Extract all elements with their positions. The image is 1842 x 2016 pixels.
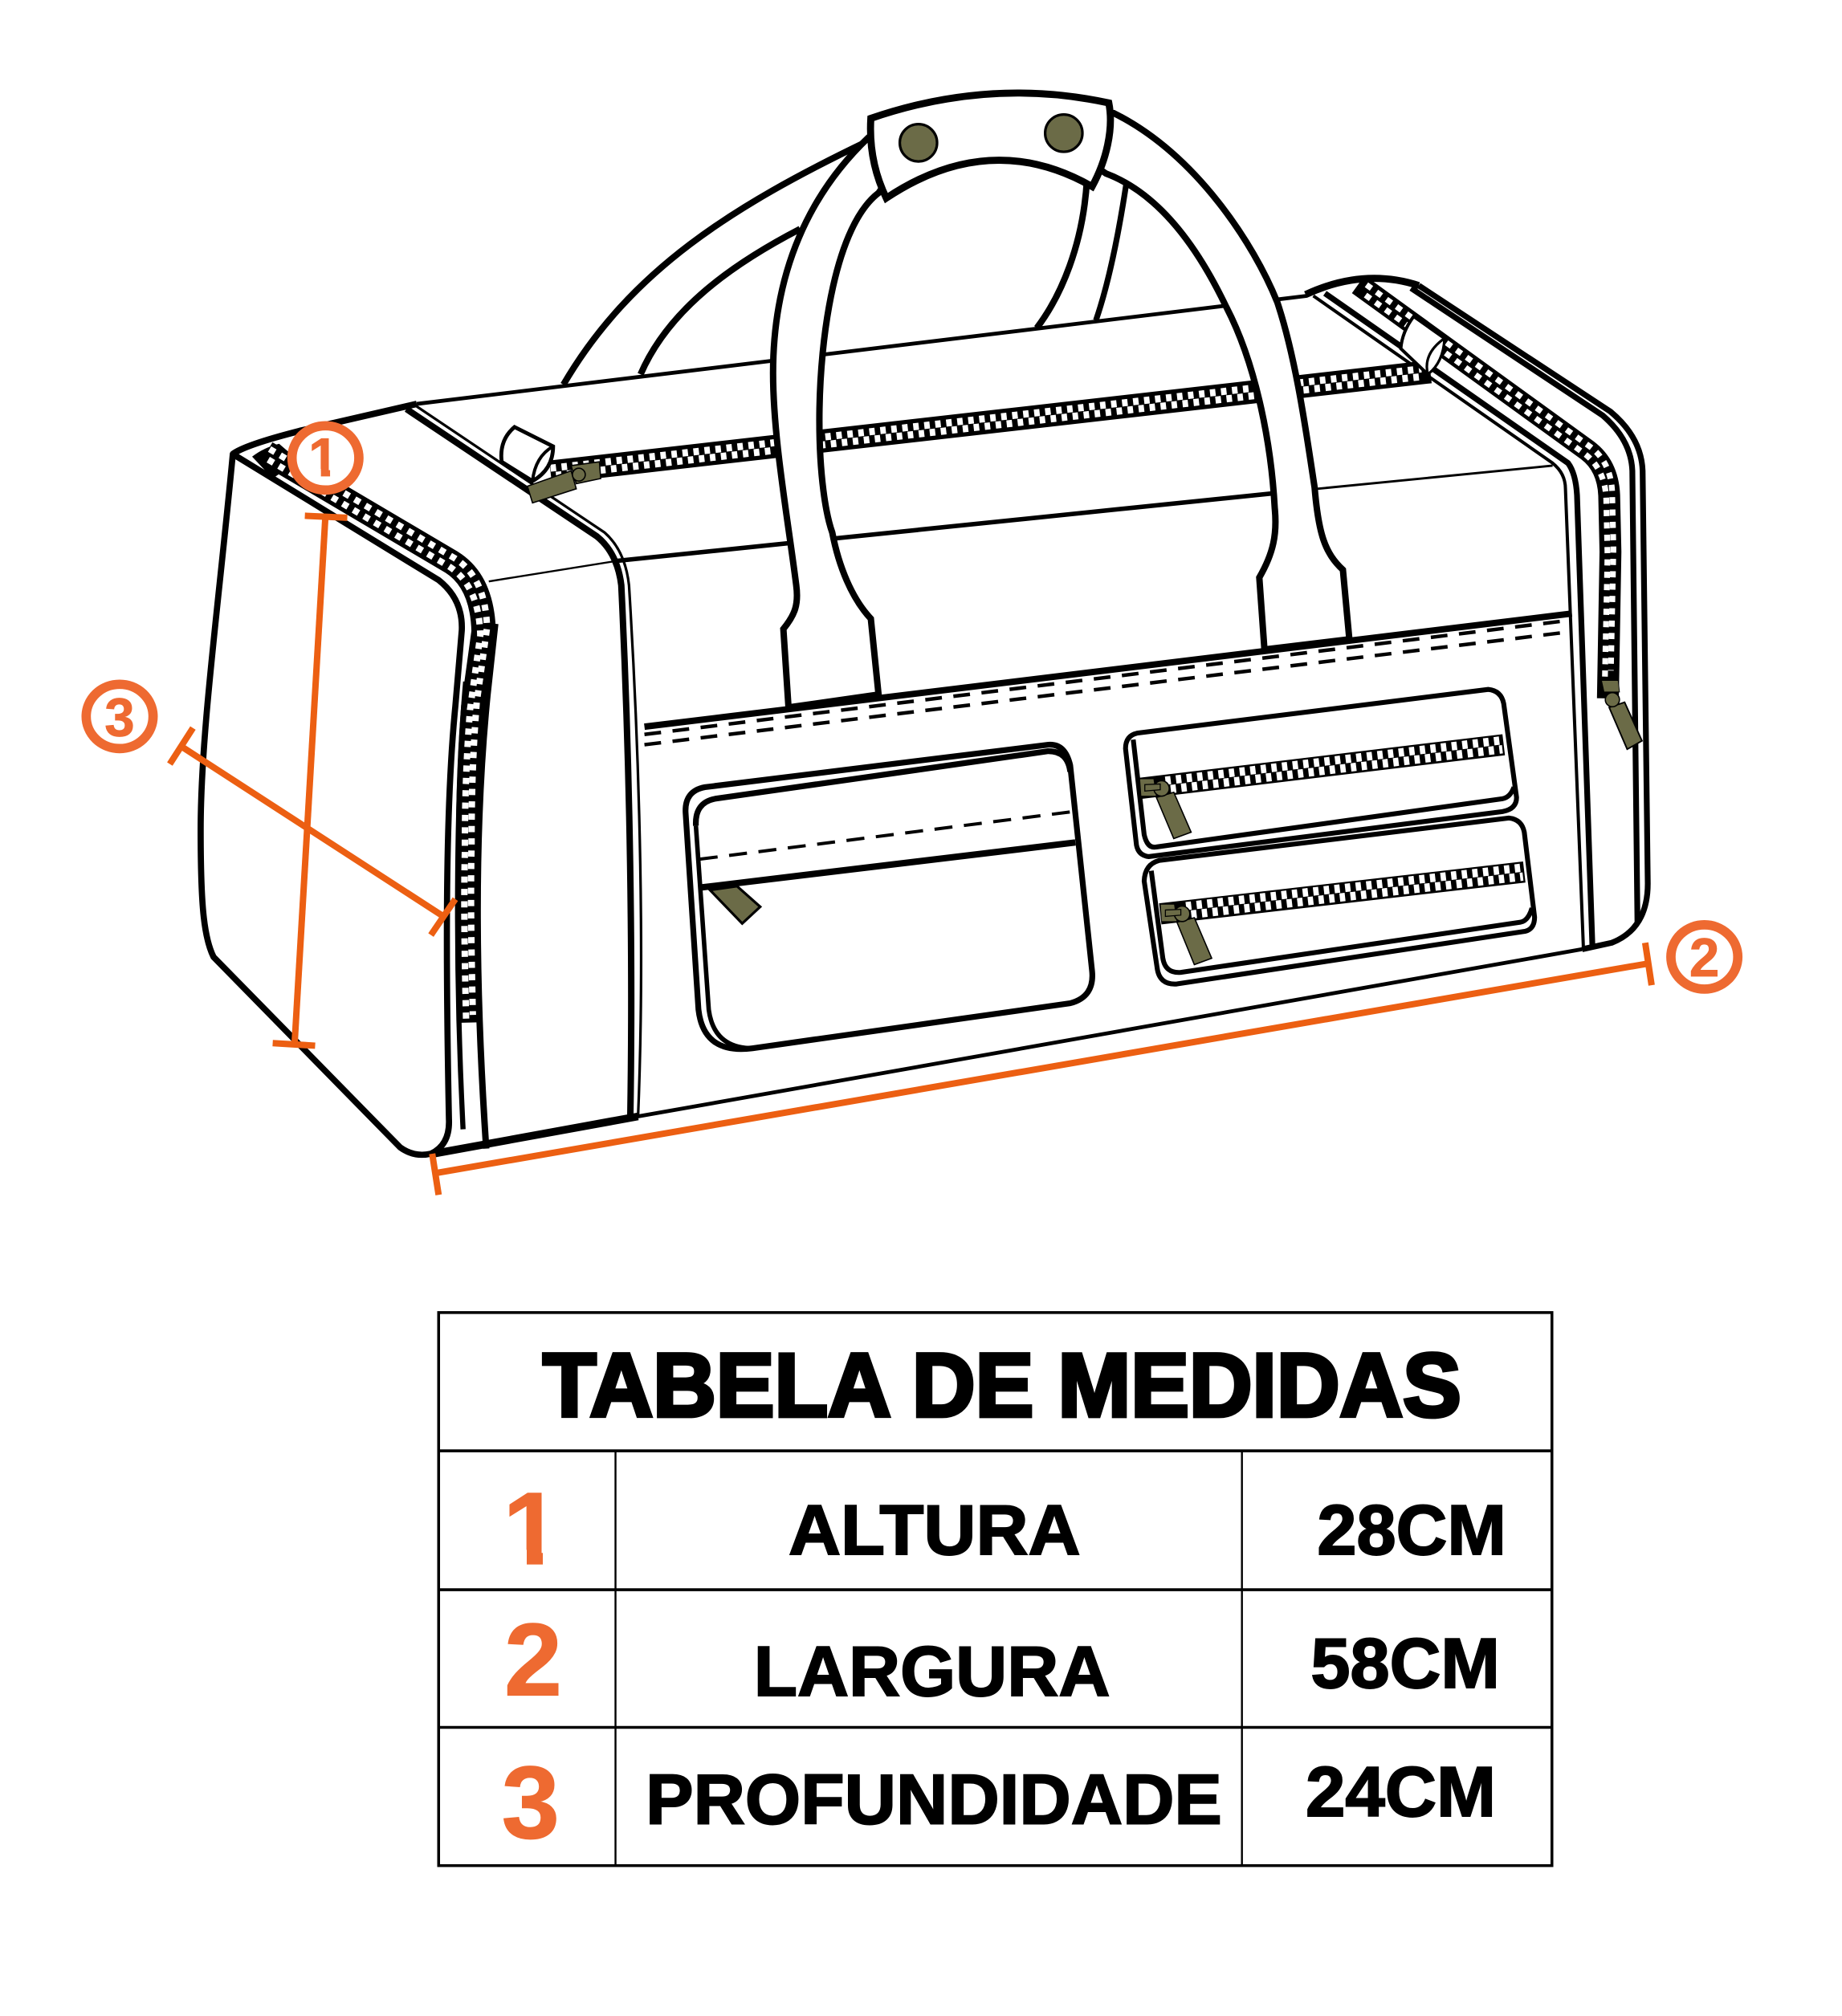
row 1: 28CM bbox=[1317, 1490, 1506, 1570]
table grid bbox=[438, 1313, 1552, 1866]
left end panel bbox=[201, 454, 495, 1155]
zipper: upper pocket bbox=[1139, 740, 1504, 790]
zipper: left end bbox=[252, 444, 487, 1023]
measure line 1: height bbox=[273, 515, 348, 1045]
row 2: LARGURA bbox=[754, 1631, 1110, 1711]
row 1: ALTURA bbox=[789, 1490, 1081, 1570]
measure line 2: width bbox=[432, 943, 1652, 1195]
zipper pull: upper pocket bbox=[1139, 779, 1191, 839]
row 3: 3 bbox=[502, 1745, 560, 1860]
row 2: 2 bbox=[504, 1603, 562, 1717]
back handle strap bbox=[564, 141, 1127, 385]
zipper end tab: right bbox=[1401, 316, 1445, 374]
front pocket seam and stitching bbox=[645, 613, 1572, 745]
icon: rivet right bbox=[1045, 115, 1082, 152]
front handle bbox=[773, 113, 1349, 707]
icon: rivet left bbox=[900, 124, 937, 161]
bag body outlines bbox=[233, 279, 1648, 1154]
zipper end tab: left bbox=[501, 427, 553, 481]
zipper pull: right end bbox=[1601, 680, 1642, 749]
row 3: PROFUNDIDADE bbox=[646, 1760, 1222, 1839]
table of measures bbox=[438, 1313, 1552, 1866]
callout 1 bbox=[292, 426, 359, 490]
lower right pocket bbox=[1144, 818, 1534, 984]
handle leather patch with rivets bbox=[870, 93, 1110, 198]
illustration: duffel bag bbox=[201, 93, 1648, 1155]
table title: TABELA DE MEDIDAS bbox=[543, 1334, 1461, 1436]
row 1 bbox=[503, 1472, 1506, 1586]
callout 3 bbox=[86, 684, 153, 748]
row 2: 58CM bbox=[1310, 1623, 1500, 1703]
zipper pull: lower pocket bbox=[1160, 904, 1212, 965]
upper right pocket bbox=[1126, 690, 1517, 857]
zipper pull: top bbox=[528, 462, 601, 503]
zipper: right end bbox=[1359, 284, 1613, 698]
left pocket bbox=[686, 744, 1092, 1049]
zipper: main top bbox=[551, 369, 1430, 476]
measure line 3: depth bbox=[169, 728, 455, 935]
row 2 bbox=[504, 1603, 1500, 1717]
zipper: lower pocket bbox=[1160, 868, 1524, 915]
callout 1: 1 bbox=[308, 428, 339, 488]
row 1: 1 bbox=[503, 1472, 560, 1586]
callout 2 bbox=[1671, 925, 1738, 989]
row 3: 24CM bbox=[1306, 1752, 1496, 1831]
row 3 bbox=[502, 1745, 1496, 1860]
callout 3: 3 bbox=[104, 687, 135, 747]
callout 2: 2 bbox=[1689, 928, 1719, 988]
